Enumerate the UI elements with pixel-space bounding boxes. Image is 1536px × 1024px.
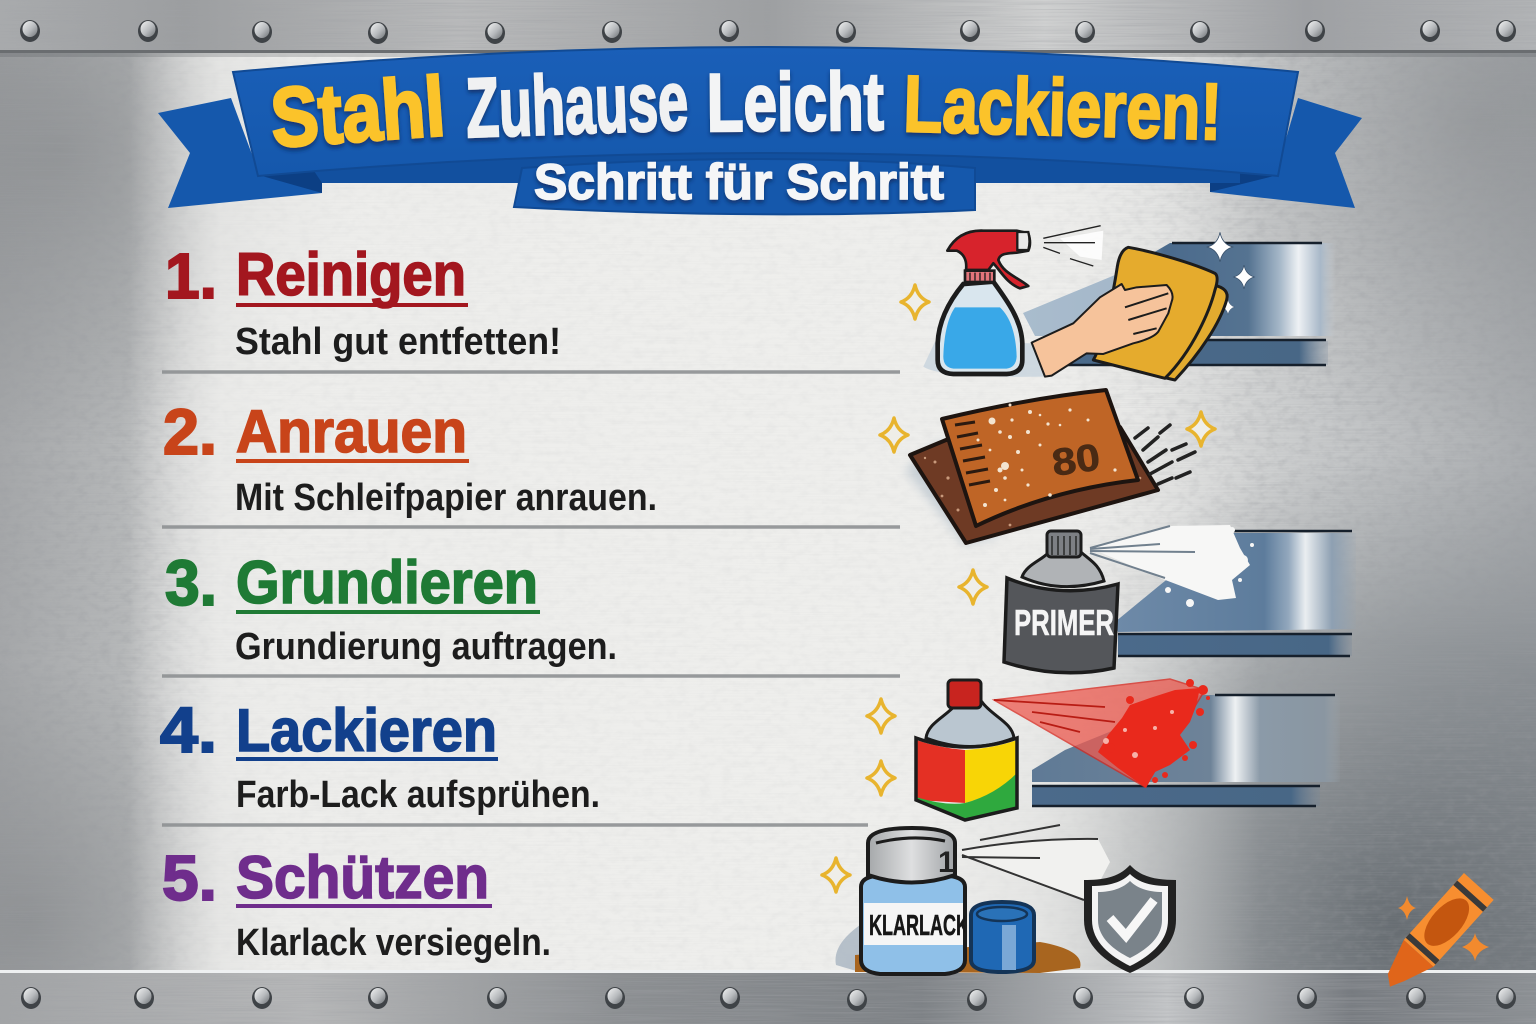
bottle neck xyxy=(965,271,994,282)
title text: Stahl xyxy=(268,59,448,165)
step 3 text xyxy=(165,547,617,668)
title banner xyxy=(158,47,1362,214)
banner left tail xyxy=(158,98,322,208)
icon: orange crayon logo xyxy=(1374,873,1494,999)
primer can xyxy=(1004,531,1118,673)
steel plate 1 xyxy=(1023,243,1336,365)
title text: Leicht xyxy=(706,56,884,149)
cap number mark: 1 xyxy=(938,846,955,879)
light flecks in paint xyxy=(1103,710,1174,758)
spray lines xyxy=(994,700,1115,732)
icon: sparkle xyxy=(867,761,895,795)
icon: sparkle xyxy=(880,418,908,452)
title text: Lackieren! xyxy=(903,59,1223,156)
neck ribs xyxy=(970,273,990,281)
step 1 text xyxy=(165,240,561,363)
icon: sparkle xyxy=(867,699,895,733)
bottle shadow xyxy=(923,342,1047,377)
icon: spray bottle, hand and cloth on steel xyxy=(923,226,1336,380)
step 4 description: Farb-Lack aufsprühen. xyxy=(236,774,600,816)
red spray cone xyxy=(994,679,1205,787)
step 3 underline xyxy=(236,610,540,614)
step 2 text xyxy=(163,396,657,519)
primer white spray xyxy=(1090,525,1254,607)
icon: clear coat can, tin and shield xyxy=(836,825,1176,974)
step 1 underline xyxy=(236,303,468,307)
steel plate 4 xyxy=(1032,695,1340,806)
primer label: PRIMER xyxy=(1014,602,1114,643)
sandpaper shadow xyxy=(905,440,1000,545)
step 1 heading: Reinigen xyxy=(236,241,466,308)
banner folds xyxy=(262,168,1274,193)
front sheet xyxy=(942,390,1138,526)
icon: sparkle xyxy=(822,858,850,892)
mist lines xyxy=(1043,226,1101,266)
sandpaper grit xyxy=(976,404,1117,507)
bottle body xyxy=(938,282,1022,374)
cap rim xyxy=(876,838,945,843)
spray lines xyxy=(1090,526,1195,578)
step 4 heading: Lackieren xyxy=(236,697,497,764)
clear coat spray xyxy=(962,839,1110,900)
can red panel xyxy=(916,740,965,803)
main banner band xyxy=(233,47,1298,176)
icon: sparkle xyxy=(959,570,987,604)
step 2 number: 2. xyxy=(163,396,217,468)
step 3 number: 3. xyxy=(165,547,217,619)
can outline xyxy=(916,738,1017,820)
step 5 number: 5. xyxy=(162,842,217,914)
can cap xyxy=(948,680,981,708)
can dome xyxy=(926,702,1014,746)
back sheet grit xyxy=(924,457,1141,526)
cloth xyxy=(1093,247,1217,378)
clear coat can xyxy=(861,828,969,974)
step 5 heading: Schützen xyxy=(236,844,489,911)
dust marks xyxy=(1135,425,1195,484)
crayon star large xyxy=(1462,933,1489,961)
banner right tail xyxy=(1210,98,1362,208)
can dome xyxy=(1022,553,1104,587)
grit number 80: 80 xyxy=(1049,437,1103,485)
spray lines xyxy=(962,825,1098,900)
cloth back layer xyxy=(1153,285,1227,380)
step 1 number: 1. xyxy=(165,240,217,312)
step 2 heading: Anrauen xyxy=(236,398,467,465)
shield xyxy=(1084,865,1176,973)
step 3 description: Grundierung auftragen. xyxy=(235,626,617,668)
can body xyxy=(861,876,965,974)
blue tin xyxy=(971,902,1034,972)
subtitle text: Schritt für Schritt xyxy=(534,154,944,210)
bottle liquid xyxy=(943,307,1017,369)
crayon body xyxy=(1374,873,1494,999)
can shadow xyxy=(836,925,860,972)
title text: Zuhause xyxy=(464,53,689,155)
step 5 underline xyxy=(236,904,492,908)
cap ribs xyxy=(1052,536,1076,555)
spray head xyxy=(947,231,1030,288)
steel plate 3 xyxy=(1115,531,1356,656)
top steel band xyxy=(0,0,1536,57)
can label strip xyxy=(864,903,963,945)
sandpaper stitches xyxy=(955,422,990,485)
icon: sparkle xyxy=(1187,412,1215,446)
step 3 heading: Grundieren xyxy=(236,549,538,616)
step 2 underline xyxy=(236,459,469,463)
step 1 description: Stahl gut entfetten! xyxy=(235,321,561,363)
crayon star small xyxy=(1398,896,1416,920)
back sheet xyxy=(910,427,1158,543)
sparkles on steel xyxy=(1207,232,1254,315)
step 5 description: Klarlack versiegeln. xyxy=(236,922,551,964)
banner middle backing xyxy=(300,150,1240,183)
brown puddle xyxy=(855,942,1080,973)
bottom steel band xyxy=(0,970,1536,1024)
subtitle ribbon xyxy=(514,159,975,214)
can cap xyxy=(868,828,955,882)
icon: paint spray can on steel xyxy=(916,679,1340,820)
step 4 number: 4. xyxy=(160,694,217,766)
red paint splat xyxy=(1098,679,1210,788)
step 5 text xyxy=(162,842,551,964)
icon: sparkle xyxy=(901,285,929,319)
step 2 description: Mit Schleifpapier anrauen. xyxy=(235,477,657,519)
step 4 underline xyxy=(236,757,498,761)
can green panel xyxy=(916,773,1017,820)
can label text: KLARLACK xyxy=(869,910,969,942)
mist cloud xyxy=(1060,231,1103,260)
step 4 text xyxy=(160,694,600,816)
icon: primer spray can on steel xyxy=(1004,525,1356,673)
hand xyxy=(1032,284,1173,377)
can cap xyxy=(1047,531,1081,557)
title text xyxy=(268,53,1223,165)
icon: sandpaper grit 80 xyxy=(905,390,1195,545)
nozzle xyxy=(1017,232,1029,250)
can body xyxy=(1004,578,1118,673)
paint can xyxy=(916,680,1017,820)
step dividers xyxy=(162,372,900,825)
can yellow panel xyxy=(965,740,1017,803)
